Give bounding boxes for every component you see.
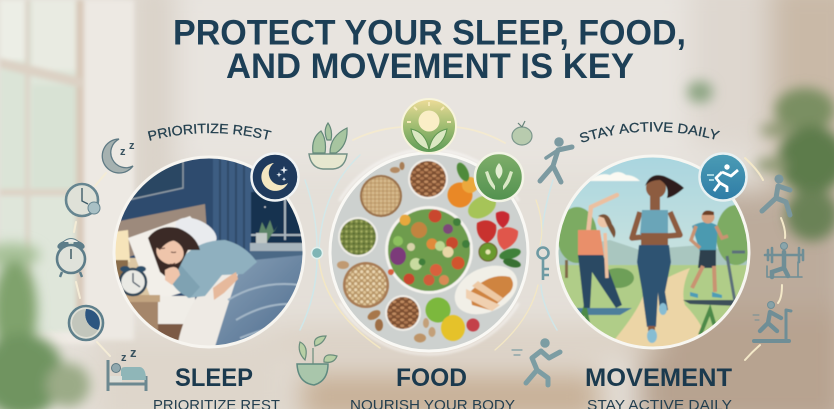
title: PROTECT YOUR SLEEP, FOOD, xyxy=(173,14,686,52)
sleep heading curved: PRIORITIZE REST xyxy=(148,124,272,141)
sleep label: SLEEP xyxy=(175,364,253,392)
movement label: MOVEMENT xyxy=(585,364,732,392)
food plate xyxy=(330,153,528,351)
icon: crescent with z: z xyxy=(129,140,135,152)
title: AND MOVEMENT IS KEY xyxy=(226,47,634,86)
movement ring xyxy=(557,156,749,348)
icon: bed with z: z xyxy=(130,345,137,360)
icon: key xyxy=(538,248,549,280)
icon: apple xyxy=(512,121,532,145)
icon: weight lifter xyxy=(765,242,803,277)
connecting arcs xyxy=(74,127,785,360)
icon: runner badge xyxy=(700,154,746,200)
movement illustration xyxy=(558,158,748,346)
icon: sprout bowl xyxy=(297,336,337,385)
icon: hands badge xyxy=(475,153,523,201)
panel: movement xyxy=(538,122,804,409)
movement heading curved: STAY ACTIVE DAILY xyxy=(580,122,720,142)
icon: clock xyxy=(66,184,100,216)
panel: sleep xyxy=(56,124,306,409)
icon: alarm clock xyxy=(56,238,86,277)
icon: bed with z xyxy=(108,345,146,391)
food label: FOOD xyxy=(396,364,467,392)
icon: moon phase clock xyxy=(69,306,103,340)
icon: moon badge xyxy=(252,154,298,200)
icon: sun and leaves badge xyxy=(402,99,456,153)
sleep ring xyxy=(114,157,304,347)
title xyxy=(173,14,686,86)
sleep illustration xyxy=(116,158,302,346)
icon: crescent with z xyxy=(102,139,135,173)
icon: bed with z: z xyxy=(121,352,127,364)
icon: running figure with arrow xyxy=(512,340,560,385)
icon: runner xyxy=(762,175,790,215)
food items xyxy=(337,159,525,342)
icon: salad bowl xyxy=(309,123,347,169)
icon: treadmill runner xyxy=(753,302,791,341)
icon: lunging figure xyxy=(540,138,572,182)
centre runner xyxy=(632,175,684,343)
icon: crescent with z: z xyxy=(120,146,126,158)
connector node xyxy=(312,248,322,258)
panel: food xyxy=(297,99,560,409)
